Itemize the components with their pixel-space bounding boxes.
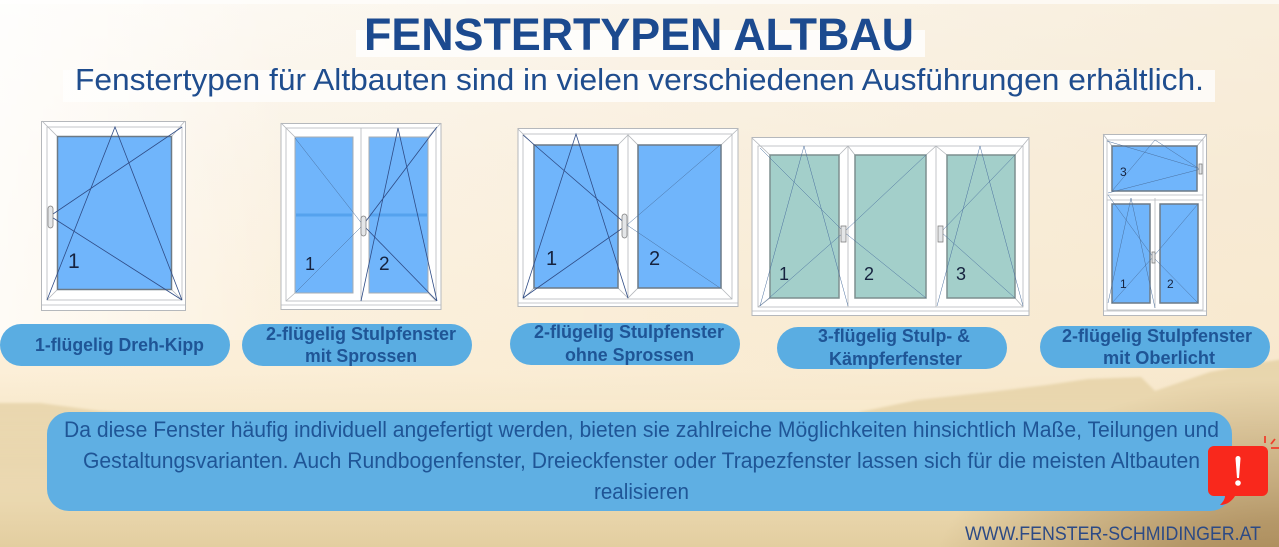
opening lines xyxy=(47,127,182,300)
glass panes xyxy=(1112,146,1197,191)
info panel xyxy=(47,412,1232,511)
window 5: Stulpfenster mit Oberlicht xyxy=(1103,134,1207,316)
info panel: realisieren xyxy=(594,479,689,504)
caption: 1-flügelig Dreh-Kipp xyxy=(0,324,230,366)
pane numbers: 3 xyxy=(1120,165,1127,179)
caption: 1-flügelig Dreh-Kipp: 1-flügelig Dreh-Kipp xyxy=(35,334,204,355)
pane numbers: 1 xyxy=(546,248,557,270)
handle xyxy=(622,214,627,238)
opening lines xyxy=(523,134,628,298)
pane number: 1 xyxy=(68,250,80,273)
caption: 2-flügelig Stulpfenster mit Oberlicht xyxy=(1040,325,1270,368)
caption: 2-flügelig Stulpfenster ohne Sprossen xyxy=(510,321,740,365)
info panel: Da diese Fenster häufig individuell angefertigt werden, bieten sie zahlreiche Möglichkeiten hinsichtlich Maße, Teilungen und xyxy=(64,417,1219,442)
icon: alert speech bubble xyxy=(1208,436,1279,505)
handles xyxy=(1152,164,1202,263)
window 4: Stulp- und Kämpferfenster xyxy=(752,138,1029,316)
caption: 2-flügelig Stulpfenster mit Sprossen: 2-flügelig Stulpfenster xyxy=(266,323,456,344)
caption: 2-flügelig Stulpfenster mit Sprossen xyxy=(242,323,472,366)
opening lines xyxy=(1107,140,1201,308)
caption: 3-flügelig Stulp- und Kämpferfenster xyxy=(777,325,1007,369)
glazing bar xyxy=(296,214,427,216)
caption: 2-flügelig Stulpfenster mit Oberlicht: 2-flügelig Stulpfenster xyxy=(1062,325,1252,346)
window 5: Stulpfenster mit Oberlicht: 1 xyxy=(1120,277,1127,291)
window 4: Stulp- und Kämpferfenster: 3 xyxy=(956,264,966,284)
caption: 2-flügelig Stulpfenster mit Oberlicht: mit Oberlicht xyxy=(1103,347,1215,368)
window 2: Stulpfenster mit Sprossen: 2 xyxy=(379,254,390,275)
window 4: Stulp- und Kämpferfenster: 2 xyxy=(864,264,874,284)
opening lines xyxy=(295,138,363,292)
caption: 3-flügelig Stulp- und Kämpferfenster: Kämpferfenster xyxy=(829,348,962,369)
window 2: Stulpfenster mit Sprossen xyxy=(281,123,441,310)
caption: 3-flügelig Stulp- und Kämpferfenster: 3-flügelig Stulp- & xyxy=(818,325,970,346)
caption: 2-flügelig Stulpfenster ohne Sprossen: ohne Sprossen xyxy=(565,344,694,365)
title: FENSTERTYPEN ALTBAU xyxy=(364,9,914,60)
handles xyxy=(841,226,943,242)
glass panes xyxy=(534,145,618,288)
handle xyxy=(361,216,366,236)
pane numbers: 1 xyxy=(779,264,789,284)
pane numbers: 1 xyxy=(305,254,315,274)
caption: 2-flügelig Stulpfenster ohne Sprossen: 2-flügelig Stulpfenster xyxy=(534,321,724,342)
glass panes xyxy=(770,155,839,298)
glass pane xyxy=(58,136,172,290)
window 3: Stulpfenster ohne Sprossen xyxy=(518,128,738,306)
window 5: Stulpfenster mit Oberlicht: 2 xyxy=(1167,277,1174,291)
handle xyxy=(48,206,53,228)
window 3: Stulpfenster ohne Sprossen: 2 xyxy=(649,248,660,270)
opening lines xyxy=(760,146,1023,306)
window 1: 1-flügelig Dreh-Kipp xyxy=(41,121,186,310)
subtitle: Fenstertypen für Altbauten sind in vielen verschiedenen Ausführungen erhältlich. xyxy=(75,62,1204,97)
info panel: Gestaltungsvarianten. Auch Rundbogenfenster, Dreieckfenster oder Trapezfenster lassen sich für die meisten Altbauten xyxy=(83,448,1200,473)
glass panes xyxy=(295,137,353,293)
caption: 2-flügelig Stulpfenster mit Sprossen: mit Sprossen xyxy=(305,345,417,366)
